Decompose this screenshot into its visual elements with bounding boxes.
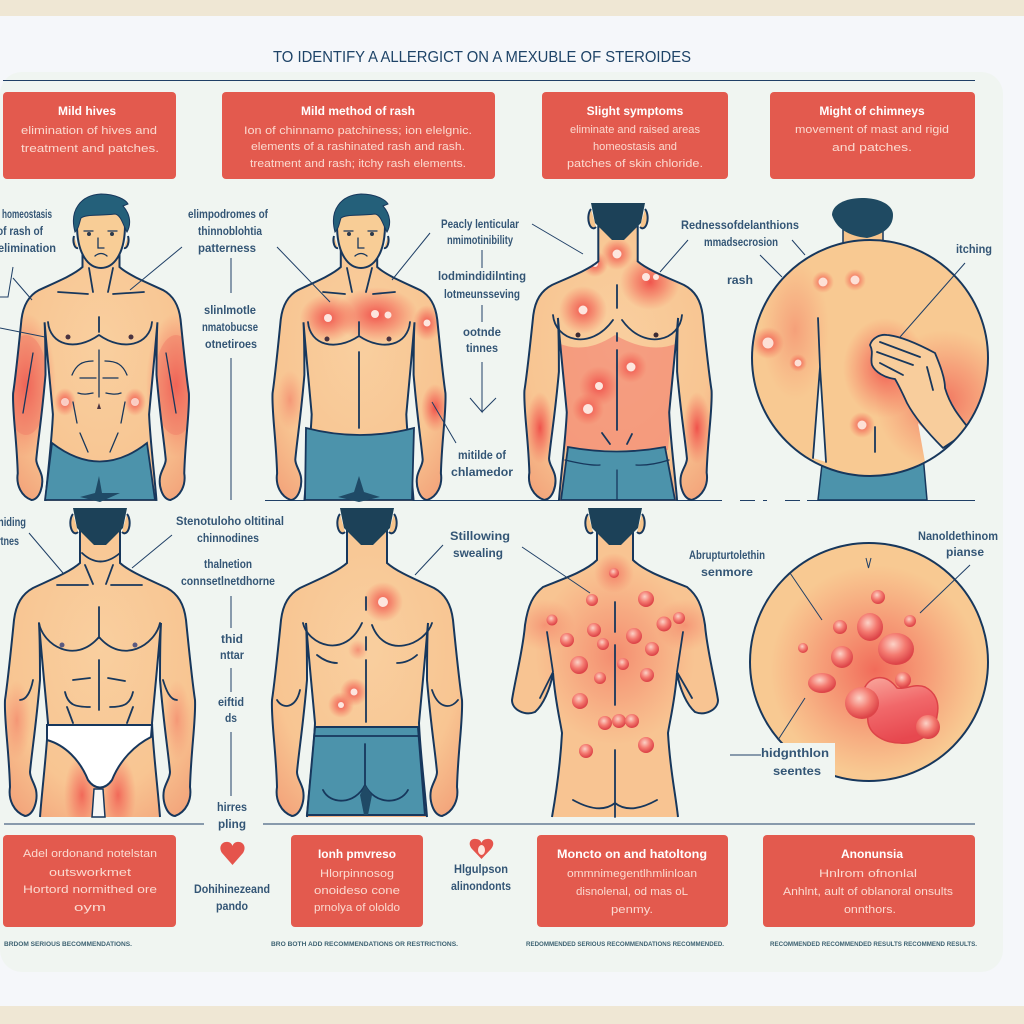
panel: bottom card 3: Moncto on and hatoltong [557, 847, 707, 861]
labels: figure 5: ds [225, 711, 237, 725]
shorts shadow [360, 785, 372, 815]
labels: center column 1: slinlmotle [204, 303, 256, 317]
labels: figure 5 [0, 514, 284, 831]
back lines [277, 597, 458, 722]
title: TO IDENTIFY A ALLERGICT ON A MEXUBLE OF STEROIDES [273, 49, 691, 66]
panel: bottom card 4: Anhlnt, ault of oblanoral onsults [783, 886, 954, 898]
labels: figure 5: nttar [220, 648, 244, 662]
rash glows and arm redness [526, 238, 711, 464]
panel: mild hives card [3, 92, 176, 179]
magnifier circle [750, 543, 988, 781]
panel: bottom card 2: onoideso cone [314, 885, 400, 897]
icon: heart 2 [470, 839, 493, 859]
panel: bottom card 3: disnolenal, od mas oL [576, 886, 688, 898]
outline [13, 233, 189, 501]
panel: slight symptoms card: eliminate and raised areas [570, 124, 700, 136]
shorts crotch mark [338, 476, 380, 502]
footnotes: BRDOM SERIOUS BECOMMENDATIONS. [4, 942, 132, 948]
panel: mild hives card: Mild hives [58, 104, 116, 118]
shorts crotch mark [80, 476, 120, 502]
back of head [70, 508, 130, 545]
labels: figure 2 [277, 217, 526, 479]
panel: mild method card: treatment and rash; itchy rash elements. [250, 158, 466, 170]
panel: slight symptoms card [542, 92, 728, 179]
labels: figure 2: lotmeunsseving [444, 287, 520, 301]
shorts [45, 443, 155, 500]
labels: figure 8: pianse [946, 545, 984, 559]
panel: might of chimneys card: and patches. [832, 142, 912, 154]
figure 4: magnified back with scratching hand [752, 198, 1015, 500]
shorts [561, 447, 675, 500]
magnifier circle [752, 240, 988, 476]
gap beside arm [918, 423, 945, 462]
panel: bottom card 1 [3, 835, 176, 927]
labels: figure 1: homeostasis [2, 207, 52, 221]
panel: bottom card 3: ommnimegentlhmlinloan [567, 868, 697, 880]
icon: heart 1 [220, 842, 245, 865]
panel: bottom card 2 [291, 835, 423, 927]
outline [272, 233, 446, 501]
labels: figure 2: tinnes [466, 341, 498, 355]
back lines [553, 285, 682, 444]
figure 6: back view with few spots [272, 508, 462, 817]
label backing [740, 743, 835, 779]
labels: center column 1 [188, 207, 269, 500]
panel: bottom card 2: Hlorpinnosog [320, 868, 394, 880]
chest lines [308, 268, 410, 428]
labels: figure 5: chinnodines [197, 531, 259, 545]
briefs [47, 725, 152, 788]
labels: figure 2: mitilde of [458, 448, 507, 462]
text: heart 2 label: Hlgulpson [454, 862, 508, 876]
panel: might of chimneys card [770, 92, 975, 179]
labels: figure 1 [0, 207, 182, 337]
finger lines [877, 342, 933, 390]
panel: mild method card [222, 92, 495, 179]
panel: bottom card 1: outsworkmet [49, 867, 131, 879]
panel: bottom card 4: Hnlrom ofnonlal [819, 868, 917, 880]
panel: mild method card: Ion of chinnamo patchiness; ion elelgnic. [244, 125, 472, 137]
shorts below circle [818, 455, 927, 500]
large blister mass [865, 678, 938, 743]
outline [272, 526, 462, 817]
footnotes: RECOMMENDED RECOMMENDED RESULTS RECOMMEND RESULTS. [770, 942, 977, 948]
shorts [305, 428, 414, 500]
label: figure 6 [415, 529, 510, 575]
label: figure 6: Stillowing [450, 529, 510, 543]
panel: mild method card: elements of a rashinated rash and rash. [251, 141, 465, 153]
labels: figure 2: lodmindidilnting [438, 269, 526, 283]
panel: bottom card 2: prnolya of ololdo [314, 902, 400, 914]
panel: might of chimneys card: Might of chimneys [819, 104, 925, 118]
chest and ab lines [20, 553, 177, 723]
chest and abdomen lines [48, 268, 152, 344]
panel: mild hives card: treatment and patches. [21, 143, 159, 155]
arm redness [14, 319, 188, 450]
figure 3: slight symptoms, back view [524, 203, 712, 501]
panel: bottom card 4: Anonunsia [841, 847, 903, 861]
labels: figure 5: hirres [217, 800, 247, 814]
labels: figure 2: ootnde [463, 325, 501, 339]
back of head [588, 203, 648, 240]
figure 1: mild hives, front view [12, 194, 190, 502]
nipples [66, 334, 134, 409]
figure 8: magnified blisters [730, 543, 988, 781]
labels: figure 3: mmadsecrosion [704, 235, 778, 249]
labels: figure 2: nmimotinibility [447, 233, 513, 247]
text: heart 1 label: Dohihinezeand [194, 882, 270, 896]
panel: bottom card 4: onnthors. [844, 904, 896, 916]
labels: center column 1: patterness [198, 241, 256, 255]
labels: figure 8: Nanoldethinom [918, 529, 998, 543]
labels: figure 5: eiftid [218, 695, 244, 709]
figure 7: back covered in hives [512, 508, 718, 817]
figure 5: front view with briefs [3, 508, 195, 835]
panel: bottom card 1: Adel ordonand notelstan [23, 848, 157, 860]
panel: mild method card: Mild method of rash [301, 104, 415, 118]
back of head [337, 508, 397, 545]
panel: bottom card 1: oym [74, 902, 106, 914]
hive spots [752, 269, 875, 438]
panel: bottom card 2: Ionh pmvreso [318, 847, 396, 861]
labels: figure 2: chlamedor [451, 465, 513, 479]
labels: figure 5: thid [221, 632, 243, 646]
chest rash glow [276, 287, 449, 432]
text: heart 2 label [451, 862, 511, 893]
labels: figure 5: connsetlnetdhorne [181, 574, 275, 588]
labels: center column 1: thinnoblohtia [198, 224, 262, 238]
labels: figure 8: seentes [773, 764, 821, 778]
widespread redness [525, 556, 705, 730]
labels: figure 5: thalnetion [204, 557, 252, 571]
leg gap [92, 789, 105, 817]
labels: figure 8 [689, 529, 998, 778]
abdominal lines [23, 350, 176, 452]
back of head [585, 508, 645, 545]
panel: bottom card 4 [763, 835, 975, 927]
shorts seat lines [315, 736, 418, 801]
labels: figure 3: Rednessofdelanthions [681, 218, 799, 232]
labels: figure 8: hidgnthlon [761, 746, 829, 760]
footnotes [4, 942, 977, 948]
shorts [307, 727, 425, 815]
blisters [798, 590, 940, 739]
back and buttock lines [540, 602, 692, 817]
shorts lines [565, 460, 669, 500]
labels: figure 3: rash [727, 273, 753, 287]
panel: slight symptoms card: Slight symptoms [587, 104, 684, 118]
panel: might of chimneys card: movement of mast and rigid [795, 124, 949, 136]
labels: center column 1: elimpodromes of [188, 207, 269, 221]
label: figure 6: swealing [453, 546, 503, 560]
text: heart 1 label: pando [216, 899, 248, 913]
outline [512, 526, 718, 817]
nipples [576, 332, 658, 338]
panel: bottom card 3 [537, 835, 728, 927]
gap beside torso [813, 367, 826, 462]
rash spots [328, 582, 403, 718]
hive spots [546, 568, 685, 758]
text: heart 2 label: alinondonts [451, 879, 511, 893]
panel: mild hives card: elimination of hives and [21, 125, 157, 137]
panel: slight symptoms card: patches of skin chloride. [567, 158, 703, 170]
labels: figure 2: Peacly lenticular [441, 217, 519, 231]
nipples [324, 336, 392, 342]
panel: bottom card 3: penmy. [611, 904, 653, 916]
footnotes: BRO BOTH ADD RECOMMENDATIONS OR RESTRICTIONS. [271, 942, 458, 948]
thigh and forearm redness [6, 688, 188, 817]
head from behind [832, 198, 893, 245]
nipples [60, 642, 138, 648]
labels: center column 1: otnetiroes [205, 337, 257, 351]
labels: figure 3 [532, 218, 799, 287]
panel: slight symptoms card: homeostasis and [593, 141, 677, 153]
labels: figure 5: Stenotuloho oltitinal [176, 514, 284, 528]
panel: bottom card 1: Hortord normithed ore [23, 884, 157, 896]
labels: center column 1: nmatobucse [202, 320, 258, 334]
labels: figure 8: senmore [701, 565, 753, 579]
scratching hand [870, 335, 970, 448]
footnotes: REDOMMENDED SERIOUS RECOMMENDATIONS RECOMMENDED. [526, 942, 724, 948]
outline [524, 227, 712, 501]
figure 4: magnified back with scratching hand: itching [956, 242, 992, 256]
text: heart 1 label [194, 882, 270, 913]
outline [5, 526, 195, 817]
labels: figure 5: pling [218, 817, 246, 831]
figure 2: mild rash, front view [272, 194, 449, 502]
labels: figure 8: Abrupturtolethin [689, 548, 765, 562]
